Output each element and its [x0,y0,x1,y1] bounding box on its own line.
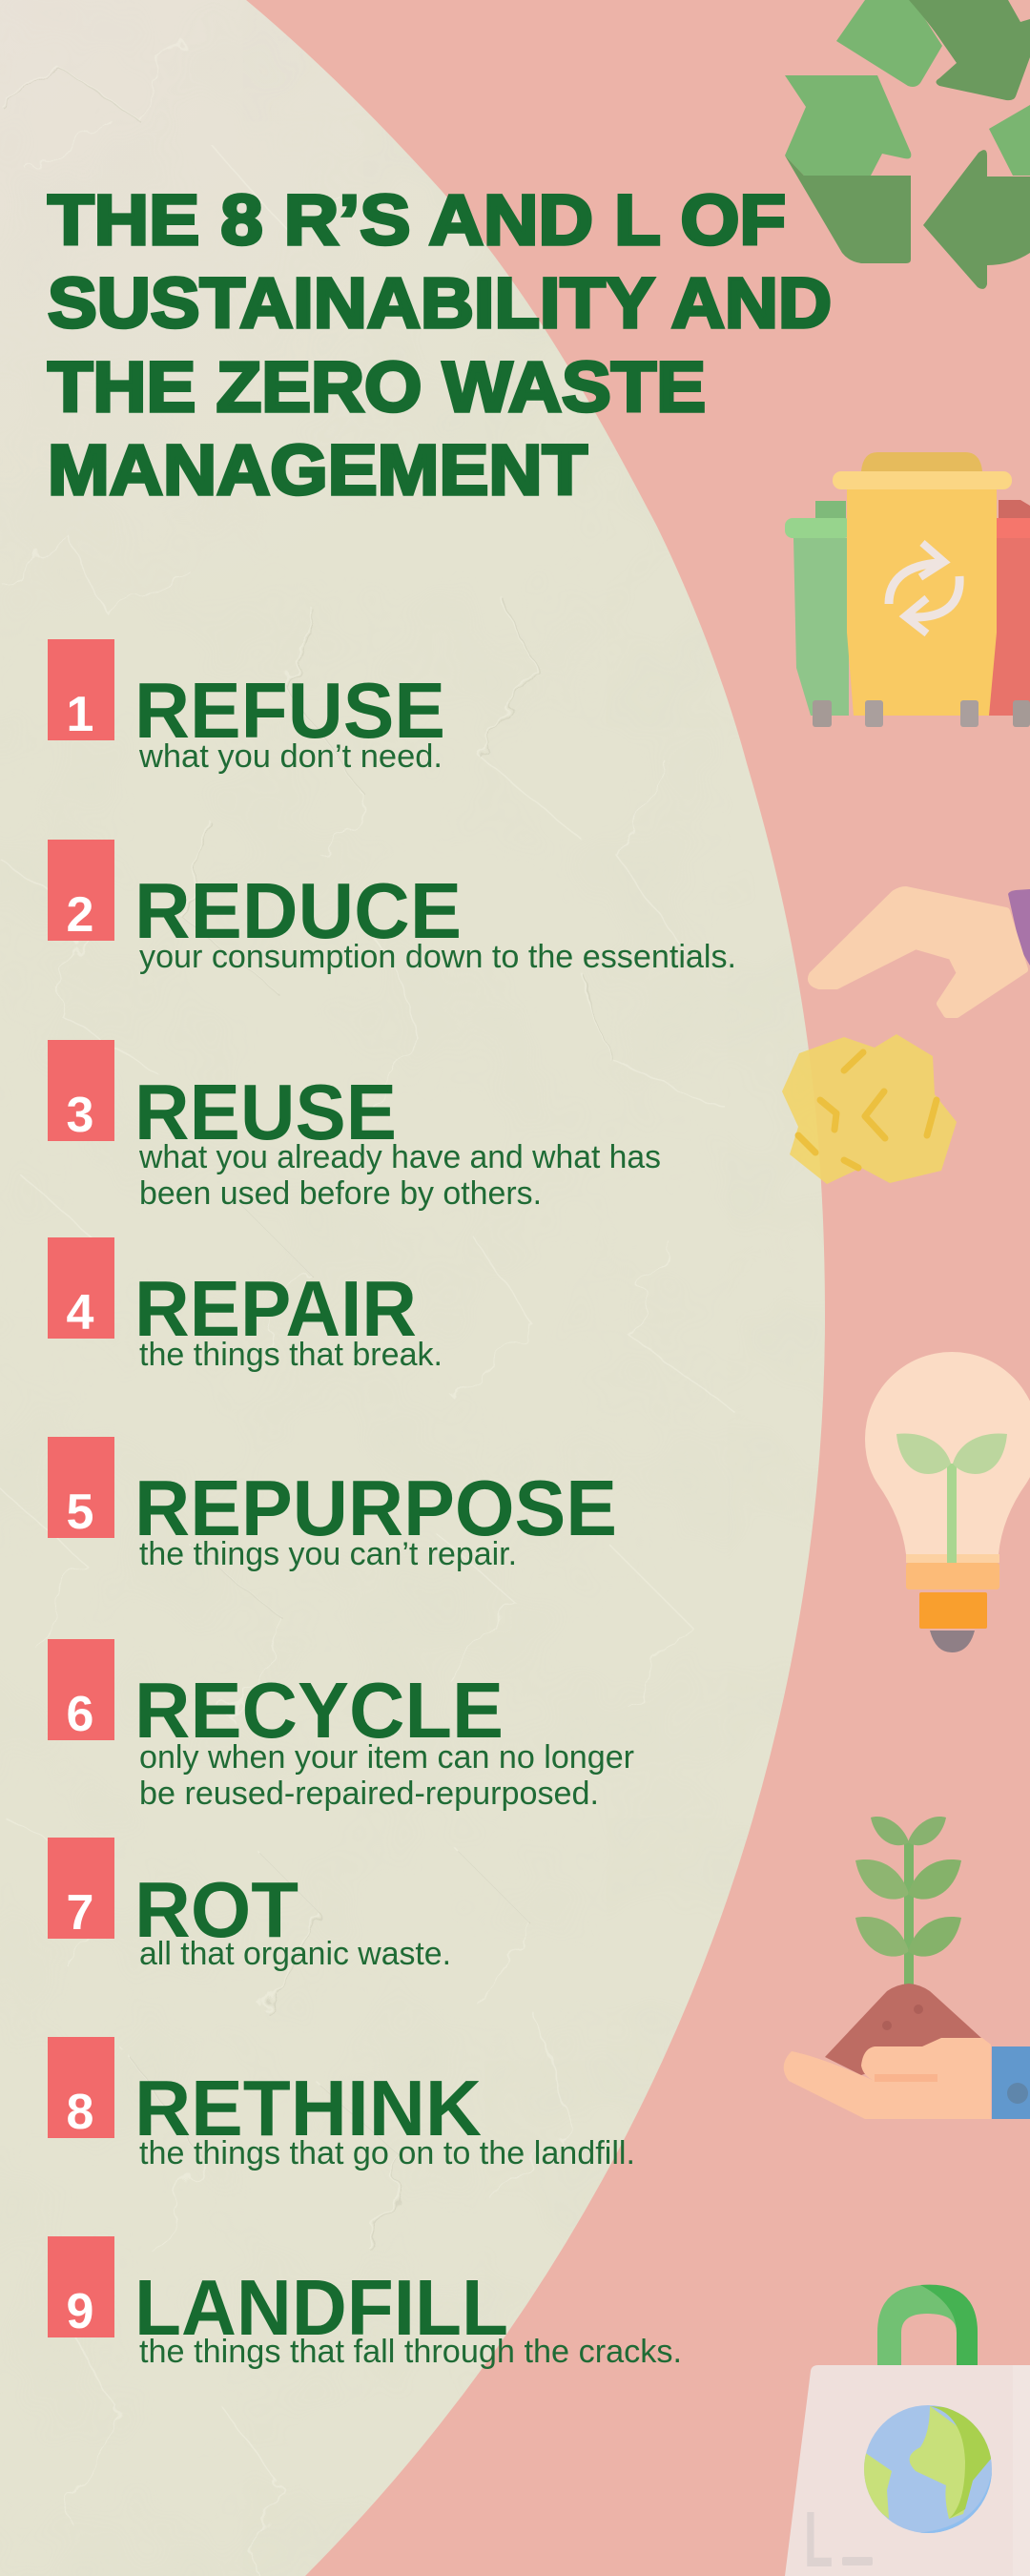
item 7: rot: 7 [67,1885,93,1941]
icon: recycling symbol [785,0,1030,289]
title: SUSTAINABILITY AND [48,263,832,343]
item 8: rethink: 8 [67,2085,93,2140]
item 5: repurpose [48,1437,617,1572]
item 1: refuse [48,639,445,775]
item 2: reduce: 2 [67,887,93,943]
item 9: landfill: the things that fall through the cracks. [139,2334,682,2370]
icon: hand holding plant [784,1817,1030,2119]
item 3: reuse: what you already have and what has [138,1139,661,1175]
item 2: reduce [48,840,736,975]
item 3: reuse: REUSE [134,1068,397,1156]
title: MANAGEMENT [48,430,587,509]
item 9: landfill: LANDFILL [134,2263,508,2352]
item 4: repair: REPAIR [134,1264,417,1353]
title: THE 8 R’S AND L OF [48,180,786,260]
item 4: repair: the things that break. [139,1337,443,1373]
item 6: recycle: only when your item can no longer [139,1739,634,1776]
item 1: refuse: 1 [67,687,93,742]
item 5: repurpose: REPURPOSE [134,1464,617,1552]
item 8: rethink [48,2037,635,2171]
item 3: reuse: been used before by others. [139,1175,542,1212]
icon: crumpled yellow paper [782,1034,957,1184]
item 6: recycle [48,1639,634,1812]
item 7: rot: all that organic waste. [139,1936,451,1972]
icon: recycling bins [785,452,1030,727]
item 6: recycle: be reused-repaired-repurposed. [139,1776,599,1812]
icon: hand dropping paper [812,889,1030,1014]
title: THE ZERO WASTE [48,347,706,426]
item 7: rot [48,1838,451,1972]
item 6: recycle: 6 [67,1687,93,1742]
item 3: reuse: 3 [67,1088,93,1143]
item 4: repair: 4 [67,1285,94,1340]
item 3: reuse [48,1040,661,1212]
item 1: refuse: what you don’t need. [138,738,443,775]
item 6: recycle: RECYCLE [134,1666,504,1755]
item 2: reduce: REDUCE [134,866,462,955]
item 8: rethink: RETHINK [134,2064,482,2152]
item 9: landfill: 9 [67,2284,93,2339]
item 5: repurpose: the things you can’t repair. [139,1536,517,1572]
item 9: landfill [48,2236,682,2370]
icon: light bulb with sprout [865,1352,1030,1652]
item 5: repurpose: 5 [67,1485,93,1540]
item 8: rethink: the things that go on to the landfill. [139,2135,635,2171]
icon: tote bag with globe [785,2285,1030,2576]
title [48,180,832,509]
item 7: rot: ROT [134,1865,299,1954]
item 2: reduce: your consumption down to the essentials. [139,939,736,975]
item 4: repair [48,1237,443,1373]
item 1: refuse: REFUSE [134,666,445,755]
